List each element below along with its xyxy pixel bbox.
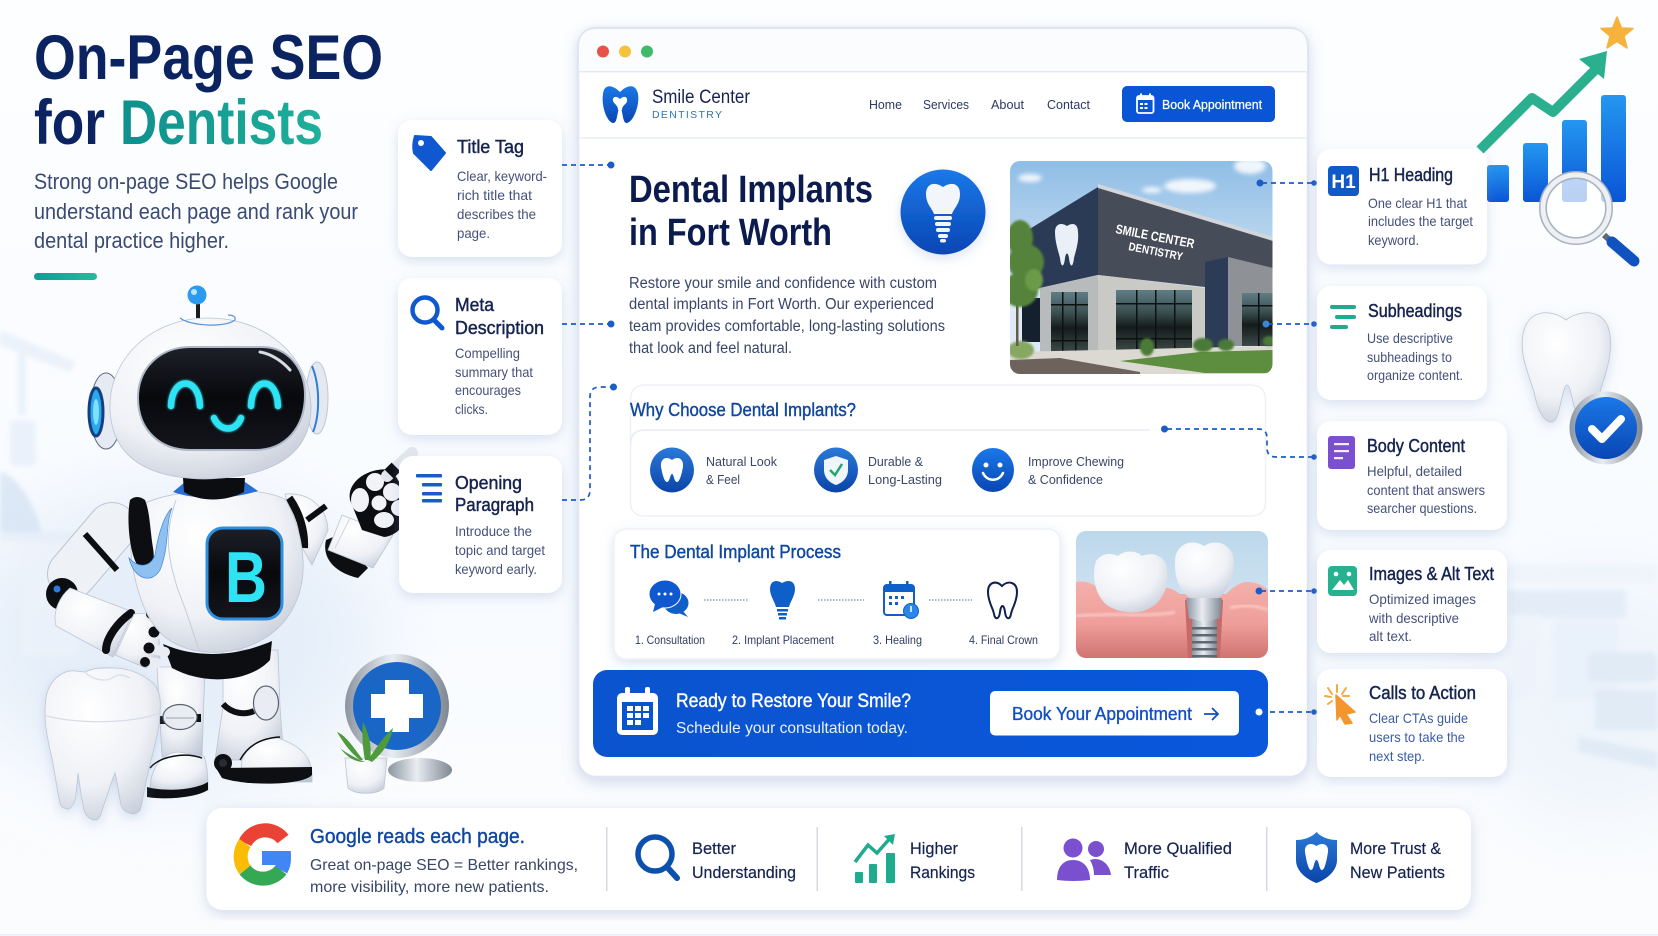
intro paragraph: understand each page and rank your — [34, 199, 358, 224]
section: why choose dental implants — [630, 385, 1266, 516]
photo: dental clinic building: DENTISTRY — [1127, 241, 1184, 263]
panel: meta description: Meta — [455, 295, 495, 315]
panel: meta description — [398, 278, 562, 435]
title: On-Page SEO — [34, 23, 383, 93]
connector: images and alt text — [1256, 588, 1317, 594]
growth chart illustration — [1480, 17, 1634, 261]
page headline — [629, 169, 873, 254]
icon: tag — [413, 136, 445, 170]
robot mascot — [46, 286, 412, 798]
panel: title tag: Clear, keyword- — [457, 168, 547, 184]
process dotted connectors — [704, 599, 972, 601]
icon: calendar white — [617, 687, 658, 735]
benefit: durable — [814, 448, 942, 492]
robot chest screen: B — [225, 538, 267, 618]
icon: google g — [241, 830, 284, 879]
book your appointment button — [990, 691, 1239, 736]
benefit: more trust and new patients: New Patients — [1350, 863, 1445, 882]
robot chest screen — [207, 528, 282, 619]
panel: calls to action: users to take the — [1369, 729, 1465, 745]
panel: meta description: encourages — [455, 382, 521, 398]
panel: title tag: page. — [457, 225, 490, 241]
benefit: improve chewing — [972, 448, 1124, 492]
panel: meta description: Description — [455, 318, 544, 338]
benefit: durable: Durable & — [868, 454, 923, 469]
section: dental implant process: 3. Healing — [873, 633, 922, 647]
benefit: better understanding: Understanding — [692, 863, 796, 882]
icon: subheading lines — [1330, 305, 1356, 329]
background: faded dental clinic right — [1508, 563, 1658, 770]
footer hairline — [0, 934, 1658, 936]
panel: images and alt text: with descriptive — [1368, 610, 1459, 626]
site navigation: About — [991, 97, 1024, 112]
google reads text: Google reads each page. — [310, 826, 525, 848]
connector: meta description — [562, 320, 614, 328]
panel: calls to action — [1317, 669, 1507, 777]
panel: images and alt text: Images & Alt Text — [1369, 564, 1494, 584]
connector: h1 heading — [1256, 180, 1317, 186]
robot head — [110, 318, 311, 479]
benefit: more qualified traffic — [1057, 838, 1232, 882]
connector: subheadings — [1262, 320, 1317, 328]
panel: opening paragraph: Paragraph — [455, 495, 534, 515]
panel: body content: searcher questions. — [1367, 500, 1477, 516]
section: dental implant process: 4. Final Crown — [969, 633, 1038, 647]
icon: click cursor — [1325, 685, 1355, 724]
icon: h1 — [1328, 166, 1359, 196]
benefit: more trust and new patients: More Trust & — [1350, 839, 1442, 858]
intro paragraph: dental practice higher. — [34, 228, 229, 253]
robot right arm — [285, 453, 412, 578]
browser top bar — [579, 29, 1307, 72]
page intro text: team provides comfortable, long-lasting solutions — [629, 318, 945, 335]
panel: subheadings: Subheadings — [1368, 301, 1462, 321]
intro paragraph: Strong on-page SEO helps Google — [34, 169, 338, 194]
background: faded dental clinic left — [0, 330, 78, 655]
page headline: Dental Implants — [629, 169, 873, 211]
panel: opening paragraph — [399, 456, 562, 593]
photo: dental clinic building — [1002, 158, 1275, 374]
robot neck — [183, 478, 245, 500]
title: for — [34, 88, 105, 158]
call to action banner — [593, 670, 1268, 757]
section: why choose dental implants: Why Choose Dental Implants? — [630, 400, 856, 420]
google reads text: Great on-page SEO = Better rankings, — [310, 857, 578, 874]
icon: image — [1328, 566, 1357, 596]
panel: h1 heading: includes the target — [1368, 213, 1473, 229]
background: soft floor wash — [0, 490, 1658, 820]
book appointment button: Book Appointment — [1162, 97, 1262, 112]
benefit: better understanding: Better — [692, 839, 736, 858]
benefit: natural look: & Feel — [706, 472, 740, 487]
site navigation: Smile Center — [652, 87, 751, 108]
section: dental implant process — [614, 529, 1060, 659]
panel: meta description: clicks. — [455, 401, 488, 417]
book appointment button — [1122, 86, 1275, 122]
google reads text: more visibility, more new patients. — [310, 879, 549, 896]
panel: images and alt text: alt text. — [1369, 628, 1412, 644]
panel: h1 heading: H1 Heading — [1369, 165, 1453, 185]
robot visor — [138, 347, 305, 450]
star — [1601, 17, 1633, 48]
benefit: higher rankings: Higher — [910, 839, 958, 858]
benefit: durable: Long-Lasting — [868, 472, 942, 487]
robot left arm — [46, 527, 186, 668]
page intro text: dental implants in Fort Worth. Our experienced — [629, 296, 934, 313]
section: dental implant process: 2. Implant Placement — [732, 633, 835, 647]
bars — [1487, 95, 1626, 202]
panel: title tag: rich title that — [457, 187, 532, 203]
icon: implant — [770, 581, 795, 620]
page intro text: that look and feel natural. — [629, 340, 792, 357]
robot pelvis — [163, 641, 272, 679]
icon: paragraph lines — [416, 474, 442, 502]
panel: subheadings: subheadings to — [1367, 349, 1452, 365]
panel: body content: Body Content — [1367, 436, 1465, 456]
robot torso — [128, 482, 303, 652]
panel: title tag: describes the — [457, 206, 536, 222]
section: dental implant process: 1. Consultation — [635, 633, 705, 647]
panel: images and alt text — [1317, 550, 1507, 653]
benefit: more trust and new patients — [1296, 832, 1445, 883]
panel: subheadings: organize content. — [1367, 367, 1463, 383]
large tooth — [45, 668, 160, 820]
robot head top seam — [180, 315, 235, 325]
page intro text: Restore your smile and confidence with custom — [629, 275, 937, 292]
page headline: in Fort Worth — [629, 212, 832, 254]
connector: body content — [1161, 426, 1317, 460]
connector: opening paragraph — [562, 384, 617, 500]
benefit: improve chewing: Improve Chewing — [1028, 454, 1124, 469]
site navigation — [579, 86, 1307, 139]
panel: body content — [1317, 421, 1507, 530]
intro paragraph — [34, 169, 358, 253]
icon: magnifier — [412, 298, 442, 328]
magnifying glass — [1543, 175, 1634, 261]
icon: tooth outline — [988, 583, 1017, 618]
robot antenna — [188, 286, 206, 318]
panel: h1 heading: keyword. — [1368, 232, 1419, 248]
call to action banner: Schedule your consultation today. — [676, 720, 908, 737]
book your appointment button: Book Your Appointment — [1012, 704, 1192, 724]
panel: meta description: summary that — [455, 364, 533, 380]
icon: implant circle — [900, 170, 986, 254]
panel: calls to action: next step. — [1369, 748, 1425, 764]
panel: opening paragraph: Opening — [455, 473, 522, 493]
robot left leg — [147, 667, 208, 798]
panel: subheadings — [1317, 286, 1487, 400]
site navigation: Services — [923, 97, 969, 112]
plus badge on stand — [345, 654, 452, 782]
google reads text — [310, 826, 578, 896]
icon: document — [1328, 436, 1355, 469]
panel: opening paragraph: keyword early. — [455, 561, 537, 577]
page intro text — [629, 275, 945, 357]
trend arrow — [1480, 51, 1607, 150]
benefit: natural look: Natural Look — [706, 454, 777, 469]
benefit: higher rankings — [855, 834, 975, 883]
title — [34, 23, 383, 158]
panel: h1 heading: One clear H1 that — [1368, 195, 1467, 211]
icon: calendar — [884, 581, 918, 618]
benefit: more qualified traffic: More Qualified — [1124, 839, 1232, 858]
panel: title tag — [398, 120, 562, 257]
title: Dentists — [120, 88, 323, 158]
robot ears — [89, 362, 328, 449]
icon: logo tooth — [603, 86, 638, 123]
accent bar — [34, 273, 97, 280]
panel: calls to action: Clear CTAs guide — [1369, 710, 1468, 726]
benefit: natural look — [650, 448, 777, 492]
panel: opening paragraph: topic and target — [455, 542, 545, 558]
panel: meta description: Compelling — [455, 345, 520, 361]
connector: title tag — [562, 162, 614, 168]
panel: title tag: Title Tag — [457, 137, 524, 157]
panel: body content: Helpful, detailed — [1367, 463, 1462, 479]
panel: calls to action: Calls to Action — [1369, 683, 1476, 703]
site navigation: DENTISTRY — [652, 109, 722, 121]
panel: opening paragraph: Introduce the — [455, 523, 532, 539]
section: dental implant process: The Dental Implant Process — [630, 542, 841, 562]
benefit: improve chewing: & Confidence — [1028, 472, 1103, 487]
robot right leg — [214, 650, 312, 784]
photo: dental clinic building: SMILE CENTER — [1114, 221, 1196, 251]
site navigation: Home — [869, 97, 902, 112]
panel: h1 heading — [1317, 149, 1487, 264]
panel: images and alt text: Optimized images — [1369, 591, 1476, 607]
bottom benefits strip — [206, 808, 1471, 910]
benefit: higher rankings: Rankings — [910, 863, 975, 882]
icon: chat bubbles — [649, 580, 688, 617]
benefit: better understanding — [638, 837, 796, 882]
call to action banner: Ready to Restore Your Smile? — [676, 691, 911, 712]
panel: body content: content that answers — [1367, 482, 1485, 498]
panel: subheadings: Use descriptive — [1367, 330, 1453, 346]
site navigation: Contact — [1047, 97, 1090, 112]
tooth with check badge — [1522, 313, 1642, 464]
photo: dental implant in gums — [1076, 531, 1268, 660]
browser window — [578, 28, 1308, 777]
benefit: more qualified traffic: Traffic — [1124, 863, 1169, 882]
connector: calls to action — [1256, 708, 1317, 716]
potted plant — [337, 722, 393, 793]
icon: h1: H1 — [1331, 172, 1356, 193]
